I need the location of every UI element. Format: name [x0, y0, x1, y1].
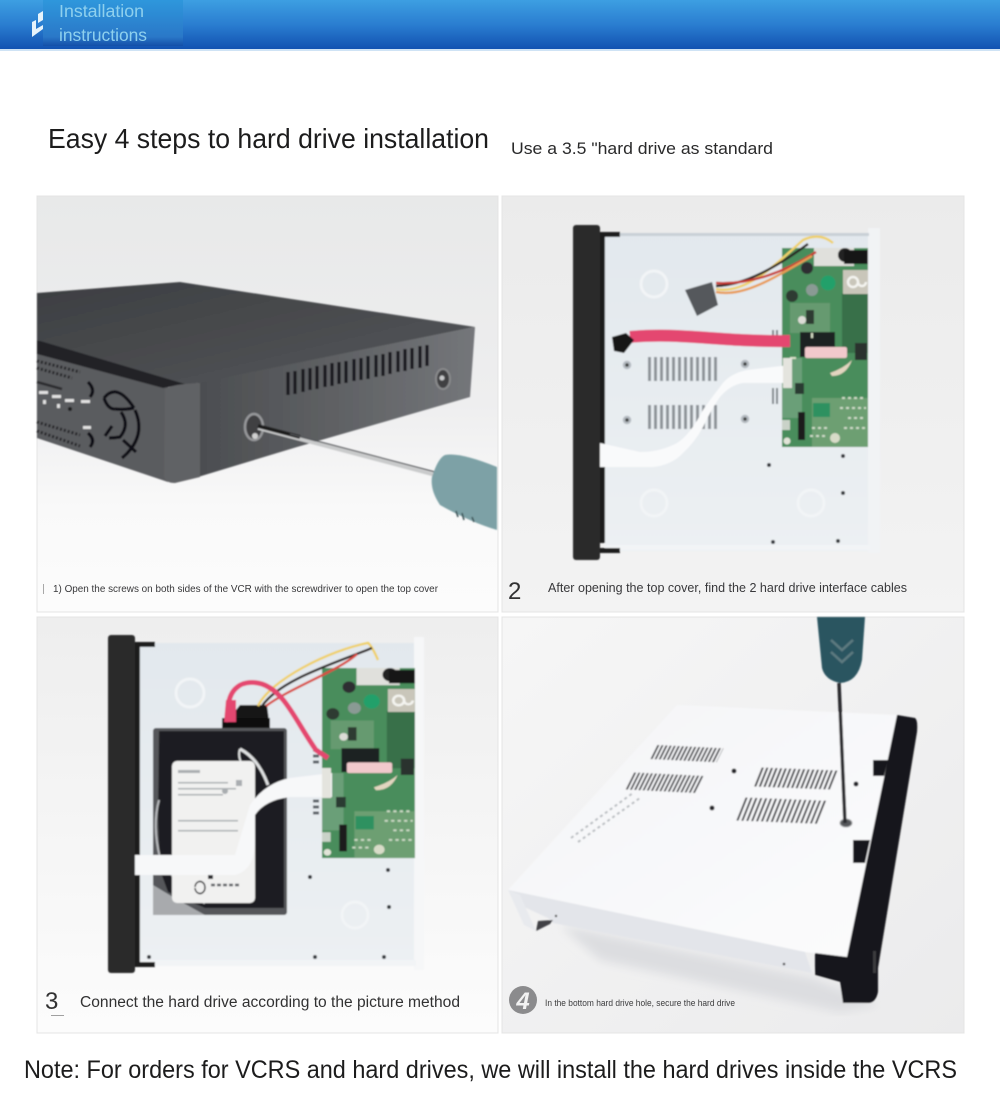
screw near [245, 414, 263, 440]
red SATA cable [228, 683, 328, 758]
panel: step 1 open the cover [37, 196, 498, 612]
photo: closed recorder and screwdriver [37, 282, 497, 530]
screw at hole [840, 819, 852, 827]
header title [59, 1, 147, 45]
step number 4 badge [509, 986, 537, 1015]
white ribbon cable [135, 773, 332, 875]
footer note: Note: For orders for VCRS and hard drives, we will install the hard drives inside the VCRS [24, 1056, 957, 1084]
screw holes [710, 768, 858, 810]
dpad control [88, 382, 139, 458]
faint sticker [571, 793, 640, 842]
recorder corner [164, 383, 200, 483]
recorder top face [37, 282, 475, 387]
white ribbon cable [600, 365, 790, 467]
recorder side face [198, 327, 475, 477]
drive connector [222, 705, 270, 728]
chassis underside [508, 705, 897, 957]
sub heading: Use a 3.5 "hard drive as standard [511, 139, 773, 158]
tray screw holes [147, 868, 391, 959]
circuit board [322, 668, 415, 858]
hard drive body [153, 705, 287, 915]
chassis right lip [868, 228, 880, 553]
step number 3: 3 [45, 988, 58, 1015]
screwdriver handle [432, 454, 497, 530]
chassis tray [138, 643, 414, 965]
red SATA cable [630, 336, 790, 341]
header title: Installation [59, 1, 144, 21]
drive platter arcs [240, 749, 268, 785]
black front bar [573, 225, 620, 560]
black front bar [815, 715, 917, 1003]
caption tick [43, 584, 44, 594]
tray embosses [641, 271, 824, 516]
panel: step 4 secure the drive [502, 617, 964, 1033]
SATA power connector [685, 282, 718, 316]
front dots and labels [39, 391, 91, 429]
caption: step 4: In the bottom hard drive hole, secure the hard drive [545, 998, 735, 1008]
screw far [436, 369, 450, 389]
black SATA plug [612, 333, 634, 353]
photo: open recorder [573, 225, 880, 560]
chassis edge [508, 890, 812, 973]
photo: underside with screwdriver [508, 617, 917, 1012]
drive silver corner [153, 885, 205, 915]
caption: step 3: Connect the hard drive according to the picture method [80, 994, 460, 1011]
circuit board [782, 248, 868, 447]
screwdriver shaft [839, 683, 845, 823]
caption: step 2: After opening the top cover, find the 2 hard drive interface cables [548, 580, 907, 595]
panel: step 2 find the cables [502, 196, 964, 612]
tray screw holes [624, 361, 748, 423]
recorder front panel [37, 342, 168, 482]
icon: header logo [32, 11, 43, 37]
vents [654, 752, 720, 755]
tray vents [648, 357, 719, 381]
header banner [0, 0, 1000, 51]
screwdriver shaft [258, 426, 435, 475]
screwdriver handle [817, 617, 865, 683]
caption: step 1: 1) Open the screws on both sides of the VCR with the screwdriver to open the top cover [53, 583, 438, 595]
power cable [716, 237, 833, 293]
power cable [258, 643, 378, 706]
tray emboss [176, 679, 368, 928]
photo: drive installed [108, 635, 424, 973]
step number 3 [45, 988, 64, 1016]
recorder front dark strip [37, 340, 185, 388]
panel: step 3 connect the drive [37, 617, 498, 1033]
drive label [172, 761, 255, 903]
header title: instructions [59, 25, 147, 45]
header label backing [43, 0, 183, 46]
main heading: Easy 4 steps to hard drive installation [48, 123, 489, 154]
black front bar [108, 635, 155, 973]
chassis tray [605, 233, 869, 551]
step number 2: 2 [508, 578, 521, 605]
side vents [288, 345, 427, 395]
step number 4 badge: 4 [515, 988, 530, 1015]
